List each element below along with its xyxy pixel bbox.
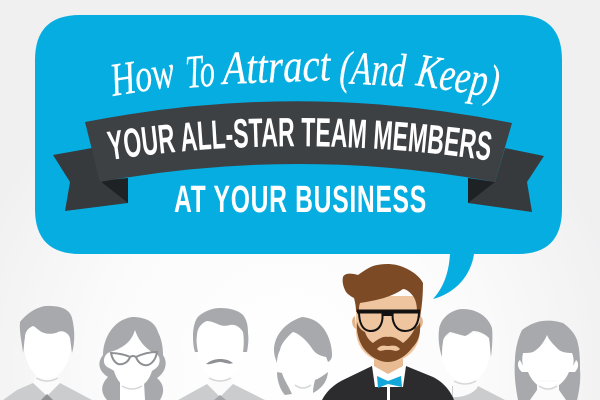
jacket bbox=[322, 366, 454, 400]
beard bbox=[357, 322, 420, 362]
hair bbox=[343, 264, 423, 318]
moustache bbox=[206, 359, 233, 364]
face bbox=[356, 296, 420, 362]
lower hair curls bbox=[277, 372, 328, 395]
title line 1: script bbox=[106, 39, 503, 109]
person 3: man with moustache bbox=[178, 308, 265, 400]
title line 2: banner text: YOUR ALL-STAR TEAM MEMBERS bbox=[106, 118, 492, 160]
main character: bearded man with glasses and bow tie bbox=[322, 264, 454, 400]
ribbon banner bbox=[53, 101, 544, 212]
person 2: woman with cat-eye glasses bbox=[99, 317, 166, 400]
title line 3: AT YOUR BUSINESS bbox=[174, 178, 426, 220]
person 4: woman silhouette bbox=[274, 317, 332, 395]
person 5: man silhouette bbox=[439, 309, 505, 400]
title line 1: script: (And bbox=[338, 42, 407, 97]
person 1: man silhouette bbox=[3, 306, 92, 400]
neck bbox=[374, 356, 403, 374]
title line 1: script: How bbox=[106, 45, 178, 107]
ears bbox=[352, 316, 423, 329]
speech bubble bbox=[35, 15, 562, 299]
title line 1: script: Keep) bbox=[413, 44, 503, 109]
glasses bbox=[357, 310, 420, 331]
title line 1: script: Attract bbox=[219, 39, 332, 95]
person 6: woman silhouette bbox=[515, 321, 580, 400]
ribbon left tail bbox=[53, 148, 128, 211]
shirt collar bbox=[372, 366, 406, 387]
title line 1: script: To bbox=[183, 45, 217, 99]
cat-eye glasses bbox=[111, 352, 157, 365]
ribbon left fold bbox=[100, 178, 128, 203]
ribbon centre band bbox=[85, 101, 512, 182]
centre shirt stripe bbox=[387, 384, 390, 400]
ribbon right fold bbox=[468, 178, 495, 203]
ribbon right tail bbox=[468, 148, 544, 212]
mouth patch bbox=[377, 346, 400, 351]
bow tie bbox=[377, 376, 402, 388]
